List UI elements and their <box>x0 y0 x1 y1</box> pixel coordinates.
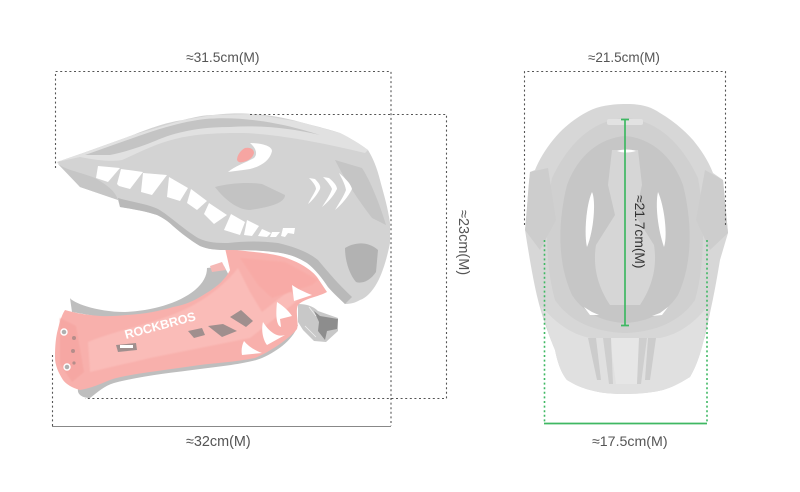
shark eye <box>228 143 272 172</box>
logo: ROCKBROS <box>123 310 197 342</box>
label: bottom width: ≈32cm(M) <box>186 434 251 450</box>
solid side-view bottom line <box>52 426 391 428</box>
chin guard grey trim <box>70 262 298 398</box>
shark gill marks <box>308 173 352 210</box>
chin strap buckle <box>298 304 338 342</box>
label: height: ≈23cm(M) <box>455 210 471 275</box>
side view helmet <box>55 113 390 398</box>
top/front view helmet <box>525 104 728 394</box>
label: brim width: ≈17.5cm(M) <box>592 434 668 450</box>
inner liner <box>547 118 703 333</box>
chin vents <box>116 310 253 352</box>
label: top width: ≈31.5cm(M) <box>186 50 260 65</box>
outer shell <box>525 104 728 394</box>
label: inner length: ≈21.7cm(M) <box>632 195 647 268</box>
chin guard white teeth <box>242 285 312 355</box>
label: front width: ≈21.5cm(M) <box>588 50 660 65</box>
screws <box>61 329 70 370</box>
side straps <box>525 168 556 250</box>
green dimension lines <box>544 119 707 424</box>
top clip <box>607 119 643 125</box>
shark teeth <box>96 166 295 237</box>
foam brim <box>541 306 708 394</box>
white vents <box>584 150 668 316</box>
top vent <box>215 183 285 210</box>
rear vent <box>345 243 378 283</box>
dotted dimension lines <box>52 72 726 426</box>
pink chin guard <box>55 248 327 390</box>
upper helmet shell <box>57 113 390 304</box>
